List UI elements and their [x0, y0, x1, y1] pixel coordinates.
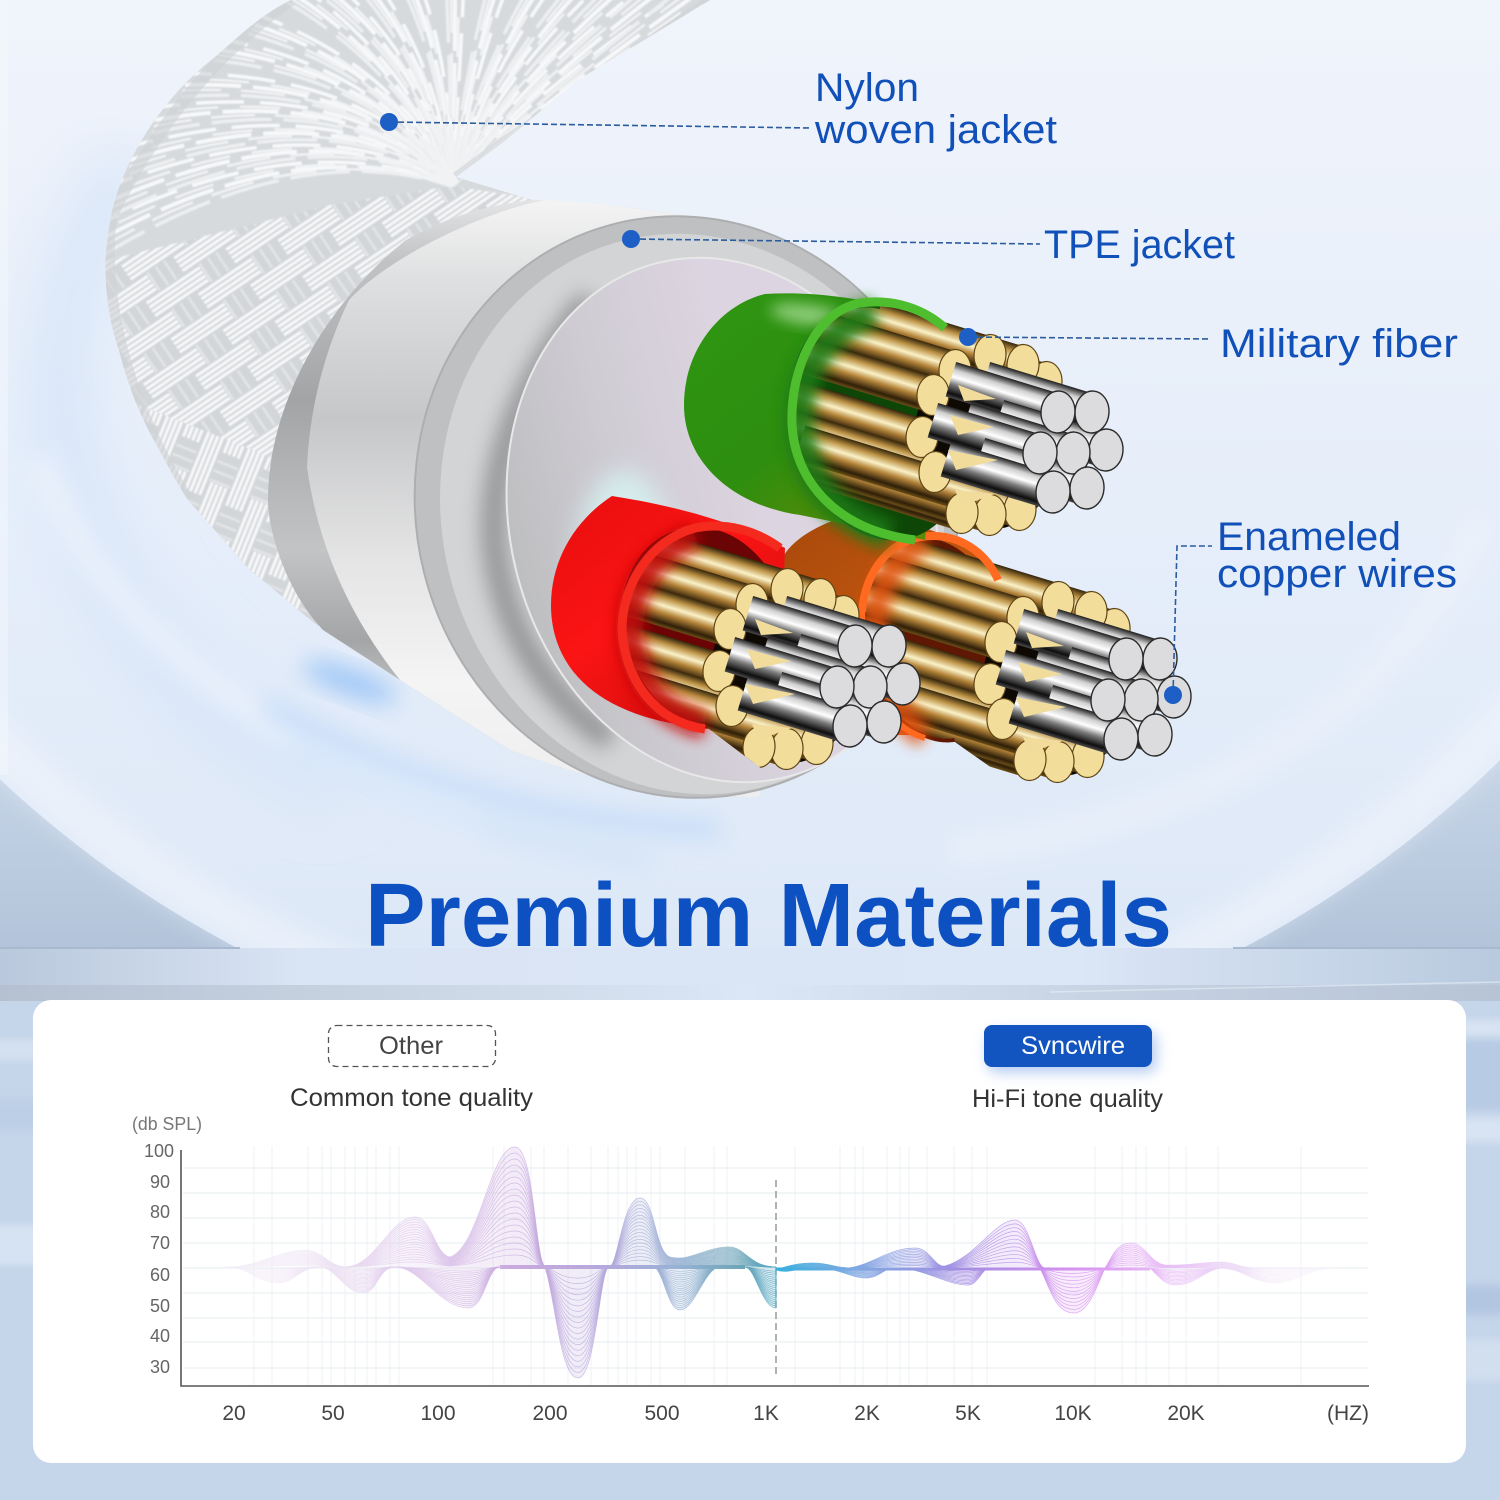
x axis labels [222, 1402, 1369, 1425]
sheath light body [307, 200, 760, 797]
y axis labels [144, 1141, 174, 1377]
callout: nylon woven jacket [380, 66, 1057, 152]
background: large light disc [0, 0, 1500, 1072]
x axis labels: 100 [420, 1402, 456, 1425]
tag: other: Other [379, 1032, 443, 1060]
x axis labels: 1K [753, 1402, 779, 1425]
y axis unit: (db SPL) [132, 1114, 202, 1134]
waveform: other [225, 1147, 776, 1378]
y axis labels: 50 [150, 1296, 170, 1316]
axes [181, 1150, 1369, 1386]
y axis labels: 30 [150, 1357, 170, 1377]
inner bevel ring [381, 180, 1003, 848]
x axis labels: 20 [222, 1402, 246, 1425]
y axis labels: 60 [150, 1265, 170, 1285]
callout: military fiber [959, 322, 1458, 366]
bevel shadow [494, 300, 610, 740]
background: horizon bands [0, 948, 1500, 1001]
wire bundle: green [684, 271, 1133, 560]
outer rim face [353, 158, 1019, 856]
y axis labels: 70 [150, 1233, 170, 1253]
x axis labels: 200 [532, 1402, 568, 1425]
callout: enameled copper wires: Enameled [1217, 515, 1401, 559]
nylon woven jacket braid [90, 0, 730, 640]
x axis labels: (HZ) [1327, 1402, 1369, 1425]
x axis labels: 50 [321, 1402, 345, 1425]
wire bundle: orange [784, 521, 1192, 784]
waveform: brand [776, 1220, 1340, 1313]
panel: frequency response card [33, 1000, 1466, 1463]
mint reflection [575, 470, 675, 670]
x axis labels: 500 [644, 1402, 680, 1425]
callout: nylon woven jacket: Nylon [815, 66, 919, 110]
callout: enameled copper wires: copper wires [1217, 552, 1457, 596]
tag: other [328, 1026, 496, 1066]
tag: brand [984, 1025, 1156, 1072]
y axis labels: 40 [150, 1326, 170, 1346]
TPE sheath body [268, 158, 1019, 856]
inner face [452, 212, 992, 828]
x axis labels: 10K [1054, 1402, 1092, 1425]
callout: TPE jacket: TPE jacket [1044, 223, 1235, 267]
callout: enameled copper wires [1164, 515, 1457, 704]
x axis labels: 20K [1167, 1402, 1205, 1425]
x axis labels: 5K [955, 1402, 981, 1425]
y axis labels: 100 [144, 1141, 174, 1161]
y axis labels: 90 [150, 1172, 170, 1192]
x axis labels: 2K [854, 1402, 880, 1425]
tag: brand: Svncwire [1021, 1032, 1125, 1060]
y axis labels: 80 [150, 1202, 170, 1222]
1K divider [775, 1180, 777, 1378]
title: Premium Materials [365, 866, 1172, 966]
callout: nylon woven jacket: woven jacket [814, 108, 1057, 152]
chart: frequency response [181, 1146, 1369, 1386]
wire bundle: red [551, 496, 921, 770]
sheath dark band [268, 200, 760, 797]
callout: TPE jacket [622, 223, 1235, 267]
caption: common tone quality: Common tone quality [290, 1084, 534, 1112]
caption: hi-fi tone quality: Hi-Fi tone quality [972, 1085, 1164, 1113]
callout: military fiber: Military fiber [1220, 322, 1458, 366]
background: blue swirl glow [0, 0, 1480, 860]
